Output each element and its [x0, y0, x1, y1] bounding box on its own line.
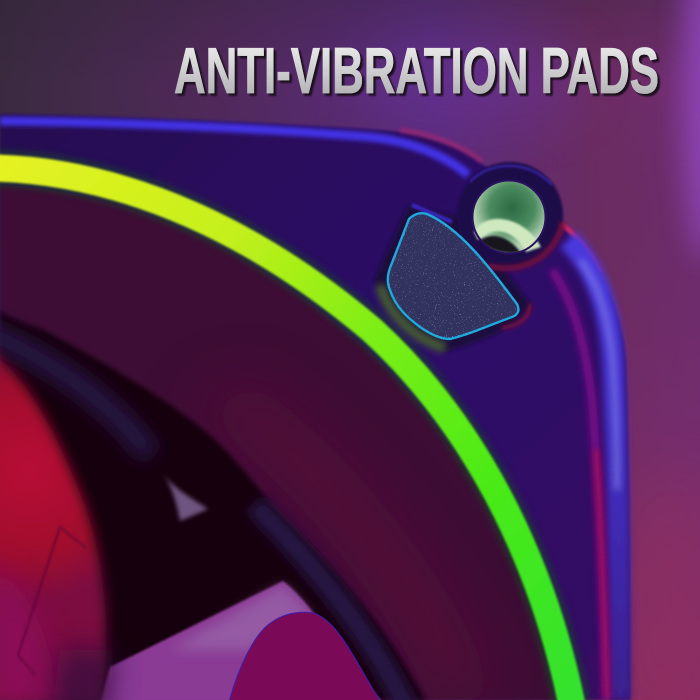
- fan blade bottom: [229, 612, 380, 700]
- lower lip band: [255, 505, 410, 700]
- small background gap: [163, 473, 208, 521]
- glowing ring: [0, 168, 572, 700]
- large background gap: [100, 581, 382, 700]
- upper lip band: [0, 325, 150, 455]
- anti-vibration pad: [388, 213, 518, 339]
- mounting screw hole: [457, 162, 563, 268]
- reddish tint on the inner surface: [190, 380, 500, 700]
- dark inner wall: [0, 312, 425, 700]
- blue right rim: [568, 240, 620, 700]
- fan opening: [0, 312, 425, 700]
- blade recess outline: [18, 527, 86, 675]
- magenta inner rim line: [552, 270, 606, 700]
- inner maroon ring surface: [0, 185, 562, 700]
- pad recess: [374, 205, 532, 352]
- frame body: [0, 114, 630, 700]
- red outer edge glow: [400, 130, 482, 162]
- fan blade left: [0, 345, 106, 700]
- blue top rim: [0, 121, 468, 175]
- fan frame: [0, 114, 630, 700]
